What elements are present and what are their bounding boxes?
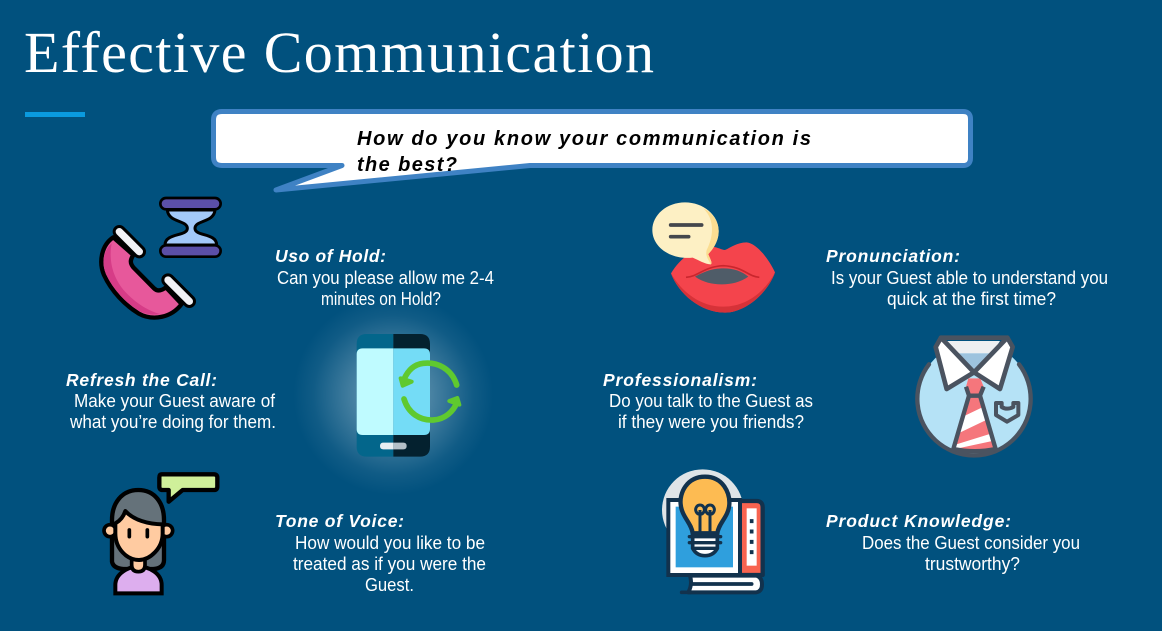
callout: question speech bubble: [214, 112, 970, 190]
icon: phone handset and hourglass: [101, 204, 217, 318]
text: Tone of Voice: How would you like to be: [295, 533, 485, 553]
text: Refresh the Call: Refresh the Call:: [66, 370, 217, 390]
icon: smartphone with refresh arrows: [293, 295, 493, 495]
text: Product Knowledge: [826, 511, 1080, 574]
text: Product Knowledge: Product Knowledge:: [826, 511, 1011, 531]
icon: woman with speech bubble: [104, 474, 217, 593]
text: Uso of Hold: [275, 246, 494, 309]
text: Uso of Hold: Can you please allow me 2-4: [277, 268, 494, 288]
icon: shirt collar and tie: [917, 338, 1031, 455]
text: Professionalism: Do you talk to the Guest as: [609, 391, 813, 411]
text: Pronunciation: [826, 246, 1108, 309]
text: Tone of Voice: Guest.: [365, 575, 414, 595]
callout: question speech bubble: How do you know your communication is: [357, 128, 811, 150]
text: Refresh the Call: what you’re doing for them.: [69, 412, 276, 432]
text: Pronunciation: Is your Guest able to understand you: [831, 268, 1108, 288]
text: Professionalism: Professionalism:: [603, 370, 757, 390]
text: Refresh the Call: [66, 370, 276, 432]
title: Effective Communication: [24, 20, 654, 85]
text: Pronunciation: Pronunciation:: [826, 246, 960, 266]
text: Tone of Voice: treated as if you were the: [293, 554, 486, 574]
icon: book with lightbulb: [662, 469, 763, 592]
text: Tone of Voice: Tone of Voice:: [275, 511, 404, 531]
text: Refresh the Call: Make your Guest aware of: [74, 391, 276, 411]
text: Uso of Hold: minutes on Hold?: [321, 289, 441, 309]
text: Product Knowledge: Does the Guest consider you: [862, 533, 1080, 553]
callout: question speech bubble: the best?: [357, 154, 457, 176]
text: Pronunciation: quick at the first time?: [887, 289, 1056, 309]
text: Professionalism: if they were you friends?: [618, 412, 804, 432]
text: Tone of Voice: [275, 511, 486, 595]
text: Product Knowledge: trustworthy?: [925, 554, 1020, 574]
text: Professionalism: [603, 370, 813, 432]
text: Uso of Hold: Uso of Hold:: [275, 246, 386, 266]
title accent line: [25, 112, 85, 117]
icon: lips with speech bubble: [652, 202, 775, 313]
